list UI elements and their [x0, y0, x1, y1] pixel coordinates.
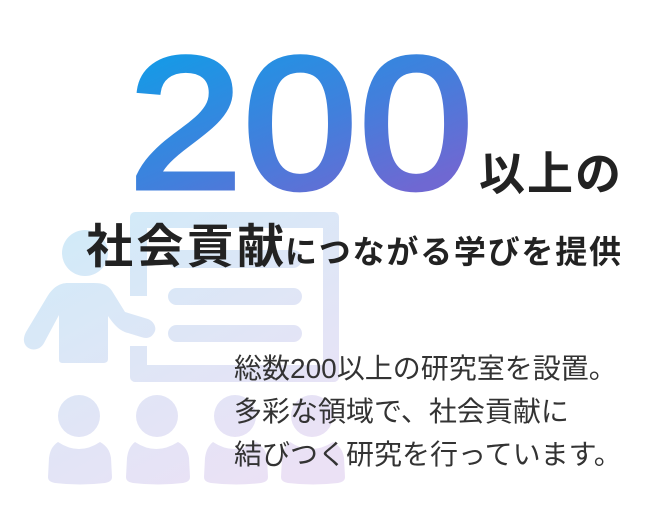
icon: presenter with board and audience [24, 212, 345, 484]
icon: presentation board [130, 212, 339, 382]
icon: presenter [24, 230, 162, 363]
heading suffix: 以上の: 以上の [479, 148, 621, 200]
body text: 多彩な領域で、社会貢献に [234, 396, 569, 427]
body text: 結びつく研究を行っています。 [234, 439, 622, 470]
icon: audience [48, 395, 345, 484]
big number 200: 200 [129, 18, 473, 228]
body text [234, 353, 622, 470]
heading: につながる学びを提供: につながる学びを提供 [285, 234, 621, 270]
heading: 社会貢献: 社会貢献 [86, 220, 284, 273]
body text: 総数200以上の研究室を設置。 [234, 353, 617, 384]
